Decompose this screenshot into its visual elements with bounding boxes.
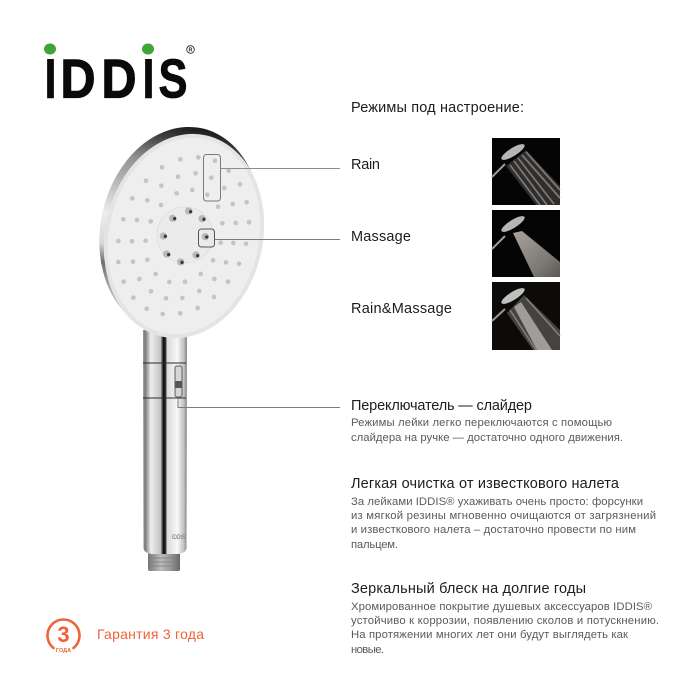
body: mirror shine: новые. xyxy=(351,644,384,656)
logo: IDDIS: R xyxy=(189,48,193,54)
center massage zone xyxy=(157,207,213,263)
body: cleaning xyxy=(351,496,656,551)
body: cleaning: из мягкой резины мгновенно очищаются от загрязнений xyxy=(351,510,656,522)
icon: 3 year warranty badge: ГОДА xyxy=(56,648,71,654)
text block: mirror shine xyxy=(351,581,659,656)
body: mirror shine xyxy=(351,601,659,656)
logo: IDDIS: I xyxy=(45,48,56,110)
body: slider xyxy=(351,417,623,444)
rain nozzles xyxy=(116,155,251,316)
body: cleaning: пальцем. xyxy=(351,539,398,551)
logo: IDDIS: S xyxy=(158,48,188,110)
callout: massage nozzle xyxy=(198,229,340,247)
photo: rain and massage mode xyxy=(492,282,560,350)
label: Massage: Massage xyxy=(351,229,411,245)
logo: IDDIS xyxy=(44,44,194,110)
text block: slider xyxy=(351,398,623,444)
text block: cleaning xyxy=(351,476,656,551)
massage nozzles xyxy=(160,207,209,266)
label: Rain: Rain xyxy=(351,157,380,173)
label: Rain&Massage: Rain&Massage xyxy=(351,301,452,317)
callout: rain nozzle group xyxy=(204,154,340,201)
warranty label: Гарантия 3 года xyxy=(97,626,204,642)
body: cleaning: За лейками IDDIS® ухаживать очень просто: форсунки xyxy=(351,496,643,508)
logo: IDDIS: I xyxy=(143,48,154,110)
shower head xyxy=(81,112,283,353)
photo: rain mode xyxy=(492,138,560,205)
body: mirror shine: устойчиво к коррозии, появлению сколов и потускнению. xyxy=(351,615,659,627)
body: cleaning: и известкового налета – достаточно провести по ним xyxy=(351,524,636,536)
icon: 3 year warranty badge: 3 xyxy=(57,622,70,647)
logo: IDDIS: D xyxy=(102,48,136,110)
body: slider: слайдера на ручке — достаточно одного движения. xyxy=(351,432,623,444)
shower handle xyxy=(143,330,187,571)
slider switch xyxy=(174,366,182,397)
body: slider: Режимы лейки легко переключаются с помощью xyxy=(351,417,612,429)
icon: 3 year warranty badge xyxy=(48,620,80,654)
heading: slider: Переключатель — слайдер xyxy=(351,398,532,414)
handle brand mark: IDDIS xyxy=(172,535,185,541)
body: mirror shine: Хромированное покрытие душевых аксессуаров IDDIS® xyxy=(351,601,653,613)
heading: mirror shine: Зеркальный блеск на долгие годы xyxy=(351,581,586,597)
heading: modes: Режимы под настроение: xyxy=(351,100,524,116)
logo: IDDIS: D xyxy=(60,48,96,110)
photo: massage mode xyxy=(492,210,560,277)
callout: slider xyxy=(178,397,340,408)
heading: cleaning: Легкая очистка от известкового налета xyxy=(351,476,620,492)
body: mirror shine: На протяжении многих лет они будут выглядеть как xyxy=(351,629,628,641)
